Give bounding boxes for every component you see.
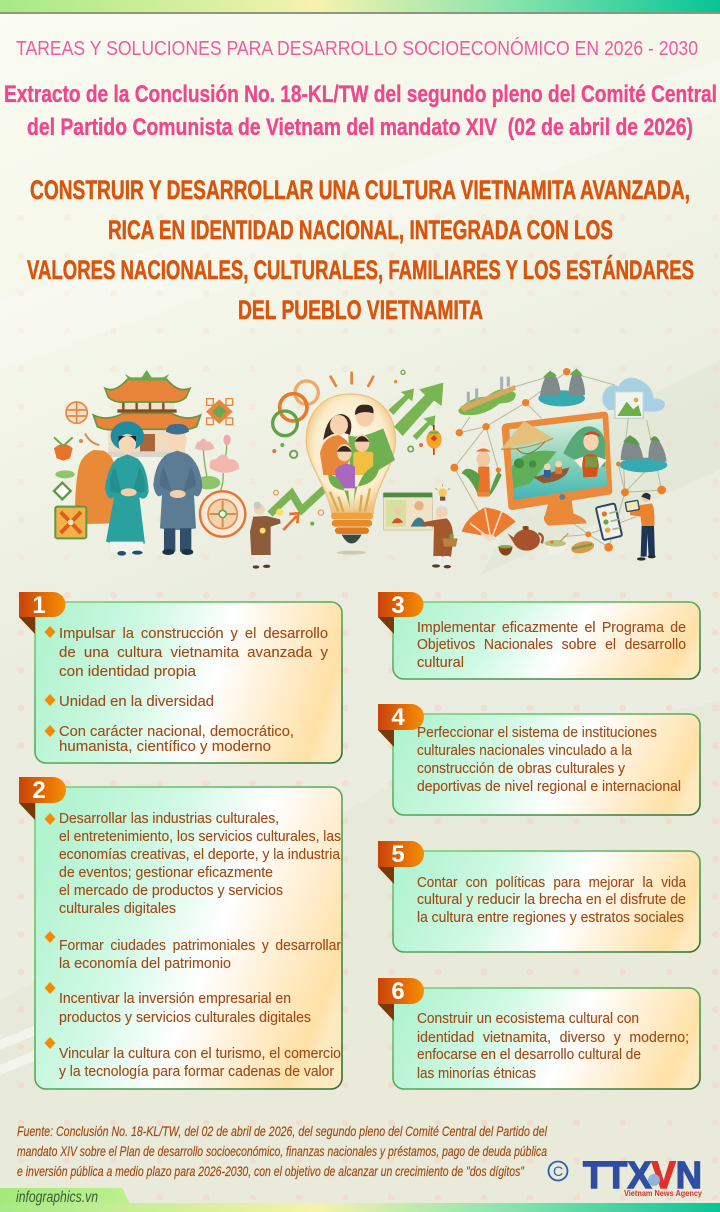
figure: elder with lights <box>250 502 283 569</box>
text block 3: Implementar eficazmente el Programa de <box>417 619 686 636</box>
bullet text 1.1: con identidad propia <box>59 663 197 680</box>
icon: video call frame <box>383 493 432 530</box>
icon: lantern <box>426 425 442 455</box>
number tab 2 <box>19 777 66 820</box>
icon: bowl and bread <box>544 533 595 555</box>
logo: TTXVN: TTXVN <box>583 1155 702 1197</box>
bullet text 1.1: Impulsar la construcción y el desarrollo <box>59 625 328 642</box>
text block 3: cultural <box>417 654 464 671</box>
number tab 5 <box>378 841 424 884</box>
icon: motifs left <box>54 433 99 499</box>
panel: item 3 <box>378 592 700 679</box>
copyright symbol <box>548 1162 568 1180</box>
bullet text 2.4: y la tecnología para formar cadenas de valor <box>59 1063 334 1080</box>
text block 6: identidad vietnamita, diverso y moderno; <box>417 1029 689 1046</box>
figure: person with tablet <box>625 493 656 561</box>
main heading: DEL PUEBLO VIETNAMITA <box>238 295 483 325</box>
icon: karst island <box>538 368 585 406</box>
text block 6: enfocarse en el desarrollo cultural de <box>417 1046 641 1063</box>
icon: computer monitor <box>502 412 612 526</box>
icon: round medallion <box>200 491 245 537</box>
icon: square motif <box>206 399 233 425</box>
network lines <box>454 372 662 547</box>
icon: hand fan <box>462 507 516 542</box>
number tab 2: 2 <box>32 777 46 804</box>
panel: item 1 <box>19 592 342 763</box>
text block 4: deportivas de nivel regional e internacional <box>417 778 681 795</box>
panel: item 5 <box>378 841 700 952</box>
bullet text 2.2: la economía del patrimonio <box>59 955 231 972</box>
icon: square tile <box>55 507 86 538</box>
icon: temple <box>93 370 201 457</box>
icon: decorative dots <box>394 370 423 452</box>
top bar <box>0 0 720 14</box>
bullet text 2.3: Incentivar la inversión empresarial en <box>59 990 291 1007</box>
icon: orange shirt <box>75 450 115 524</box>
bullet text 2.4: Vincular la cultura con el turismo, el comercio <box>59 1045 341 1062</box>
number tab 3: 3 <box>391 592 405 619</box>
bullet text 1.3 <box>44 723 294 755</box>
bullet text 2.3 <box>44 982 311 1026</box>
number tab 1: 1 <box>32 592 46 619</box>
icon: checklist board <box>596 503 622 540</box>
source note <box>17 1123 548 1179</box>
text block 4 <box>417 724 681 795</box>
icon: bridge island <box>458 377 516 415</box>
bullet text 1.1 <box>44 625 328 680</box>
panel: item 4 <box>378 704 700 815</box>
text block 5 <box>417 874 687 926</box>
text block 6: Construir un ecosistema cultural con <box>417 1010 639 1027</box>
text block 5: Contar con políticas para mejorar la vida <box>417 874 687 891</box>
icon: round motif <box>66 402 87 423</box>
bullet text 1.3: Con carácter nacional, democrático, <box>59 723 294 740</box>
figure: woman in ao dai <box>105 421 149 556</box>
number tab 4 <box>378 704 424 747</box>
text block 4: culturales nacionales vinculado a la <box>417 742 633 759</box>
copyright symbol: C <box>553 1163 563 1179</box>
figure: man in ao dai <box>153 424 202 555</box>
figure: elder with basket <box>422 506 458 568</box>
bullet text 2.1: Desarrollar las industrias culturales, <box>59 810 279 827</box>
text block 6: las minorías étnicas <box>417 1065 536 1082</box>
number tab 5: 5 <box>391 841 405 868</box>
text block 6 <box>417 1010 689 1082</box>
number tab 1 <box>19 592 66 634</box>
bullet text 2.1: economías creativas, el deporte, y la industria <box>59 846 341 863</box>
text block 4: Perfeccionar el sistema de instituciones <box>417 724 657 741</box>
icon: cloud picture <box>602 378 665 418</box>
icon: light rays <box>331 373 373 386</box>
text block 4: construcción de obras culturales y <box>417 760 625 777</box>
icon: green arrows <box>388 383 443 440</box>
illustration: digital culture network <box>383 368 667 568</box>
bullet text 1.2: Unidad en la diversidad <box>59 693 214 710</box>
icon: growth arrow line <box>270 487 327 514</box>
bullet text 2.1 <box>44 810 341 917</box>
icon: small arrow <box>283 513 298 530</box>
bottom bar <box>0 1203 720 1212</box>
number tab 6: 6 <box>391 978 405 1005</box>
bullet text 1.3: humanista, científico y moderno <box>59 738 271 755</box>
bullet text 2.3: productos y servicios culturales digitales <box>59 1009 311 1026</box>
website tab: infographics.vn <box>16 1189 98 1206</box>
icon: teapot and cup <box>498 526 543 556</box>
bullet text 2.1: de eventos; gestionar eficazmente <box>59 864 273 881</box>
icon: small bulb <box>435 484 450 501</box>
text block 5: la cultura entre regiones y estratos sociales <box>417 909 684 926</box>
main heading <box>27 175 694 325</box>
bullet text 2.4 <box>44 1037 341 1080</box>
text block 3 <box>417 619 686 671</box>
text block 3: Objetivos Nacionales sobre el desarrollo <box>417 636 686 653</box>
source note: Fuente: Conclusión No. 18-KL/TW, del 02 de abril de 2026, del segundo pleno del Comité Central del Partido del <box>17 1123 548 1139</box>
text block 5: cultural y reducir la brecha en el disfrute de <box>417 891 686 908</box>
icon: karst island right <box>619 435 667 472</box>
panel: item 2 <box>19 777 342 1089</box>
network nodes <box>450 368 666 552</box>
number tab 6 <box>378 978 424 1021</box>
panel: item 6 <box>378 978 700 1089</box>
bullet text 2.1: culturales digitales <box>59 900 176 917</box>
figure: puppet with leaves <box>462 448 502 497</box>
subtitle <box>4 81 717 141</box>
icon: conical hat <box>501 421 553 454</box>
source note: mandato XIV sobre el Plan de desarrollo socioeconómico, finanzas nacionales y préstamos, pago de deuda pública <box>17 1143 547 1159</box>
illustration: traditional couple, temple and motifs <box>54 370 395 569</box>
logo: TTXVN: Vietnam News Agency <box>624 1189 703 1198</box>
bullet text 2.1: el mercado de productos y servicios <box>59 882 283 899</box>
icon: decorative dots <box>272 443 324 526</box>
figure: water puppet <box>574 431 607 477</box>
bullet text 2.1: el entretenimiento, los servicios culturales, las <box>59 828 341 845</box>
icon: lotus <box>195 435 239 492</box>
number tab 4: 4 <box>391 704 405 731</box>
source note: e inversión pública a medio plazo para 2026-2030, con el objetivo de alcanzar un crecimiento de "dos dígitos" <box>17 1163 525 1179</box>
bullet text 2.2: Formar ciudades patrimoniales y desarrollar <box>59 937 341 954</box>
bullet text 2.2 <box>44 931 341 972</box>
illustration: Vietnamese culture scene <box>54 368 667 569</box>
icon: light bulb with family <box>306 394 395 555</box>
icon: rings <box>273 381 318 436</box>
bullet text 1.1: de una cultura vietnamita avanzada y <box>59 644 328 661</box>
number tab 3 <box>378 592 424 634</box>
